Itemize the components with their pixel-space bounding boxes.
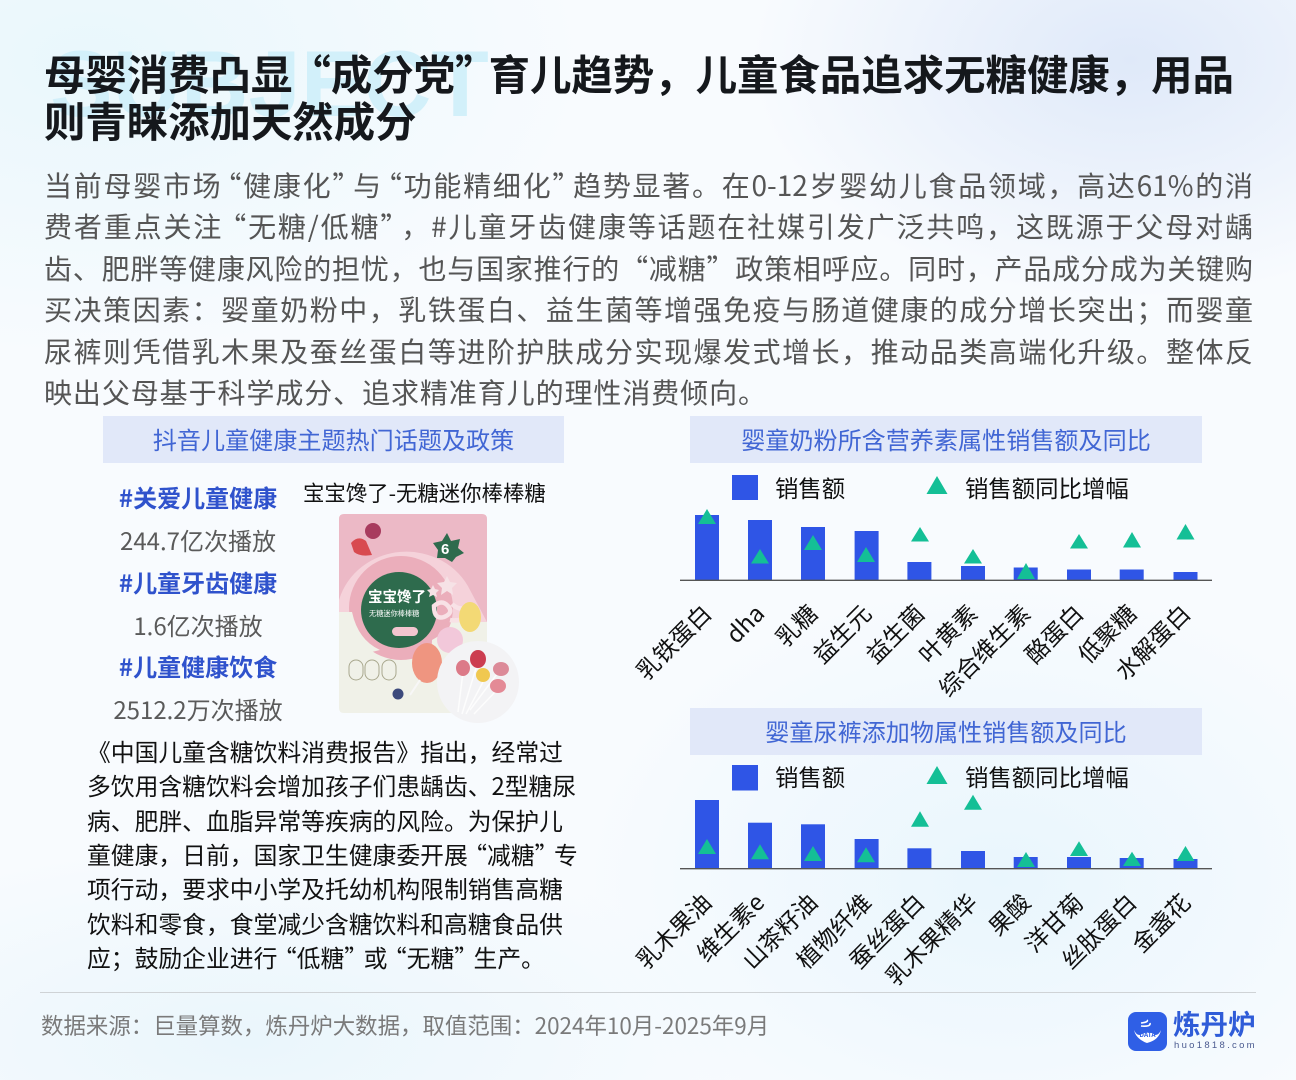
policy paragraph: 应；鼓励企业进行“低糖”或“无糖”生产。 [87,939,545,974]
intro text block: 齿、肥胖等健康风险的担忧，也与国家推行的“减糖”政策相呼应。同时，产品成分成为关键购 [44,248,1253,288]
axis labels: 蚕丝蛋白 [840,885,931,975]
plate of lollipops [437,641,519,723]
axis labels: 乳木果精华 [877,885,984,992]
policy paragraph: 多饮用含糖饮料会增加孩子们患龋齿、2型糖尿 [87,767,576,802]
axis labels: dha [717,596,771,650]
data source footer: 数据来源：巨量算数，炼丹炉大数据，取值范围：2024年10月-2025年9月 [41,1009,769,1041]
logo [1128,1002,1257,1051]
large candies [392,602,481,700]
topic list: #儿童牙齿健康 [119,564,277,599]
axis labels: 低聚糖 [1069,596,1143,670]
topic list: #关爱儿童健康 [119,479,277,514]
policy paragraph: 饮料和零食，食堂减少含糖饮料和高糖食品供 [87,904,563,940]
intro text block: 映出父母基于科学成分、追求精准育儿的理性消费倾向。 [44,372,766,412]
legend: 销售额 [775,759,845,793]
axis labels: 叶黄素 [910,596,984,670]
bars [695,515,1198,580]
heading: diaper additives chart: 婴童尿裤添加物属性销售额及同比 [765,713,1127,748]
stars and swirl [427,576,470,620]
legend: 销售额同比增幅 [965,470,1129,504]
age badge: 6 [441,541,449,558]
topic list: 1.6亿次播放 [133,607,263,642]
axis labels: 乳木果油 [627,885,718,975]
title: 母婴消费凸显“成分党”育儿趋势，儿童食品追求无糖健康，用品 [44,42,1234,102]
axis labels: 水解蛋白 [1106,596,1197,686]
policy paragraph [87,733,578,974]
axis labels: 金盏花 [1123,885,1197,959]
package text [368,586,426,636]
axis labels: 酪蛋白 [1016,596,1090,670]
intro text block: 当前母婴市场“健康化”与“功能精细化”趋势显著。在0-12岁婴幼儿食品领域，高达61%的消 [44,165,1253,205]
title [44,42,1234,149]
growth markers [698,795,1194,867]
topic list: 244.7亿次播放 [120,522,276,557]
axis [680,579,1212,581]
axis labels: 洋甘菊 [1016,885,1090,959]
brand url: huo1818.com [1174,1040,1257,1051]
policy paragraph: 《中国儿童含糖饮料消费报告》指出，经常过 [87,733,563,768]
axis labels: 植物纤维 [787,885,878,975]
heading: diaper additives chart [690,708,1202,755]
age badge [433,533,464,562]
topic list: 2512.2万次播放 [113,691,283,726]
title: 则青睐添加天然成分 [44,89,417,149]
axis labels: 丝肽蛋白 [1052,885,1143,975]
legend: 销售额同比增幅 [965,759,1129,793]
brand name: 炼丹炉 [1173,1002,1256,1042]
heading: douyin topics: 抖音儿童健康主题热门话题及政策 [153,421,514,456]
axis labels: 益生菌 [857,596,931,670]
topic list [113,479,283,726]
package text: 宝宝馋了 [368,586,426,607]
intro text block: 买决策因素：婴童奶粉中，乳铁蛋白、益生菌等增强免疫与肠道健康的成分增长突出；而婴童 [44,289,1253,329]
watermark: SUBJECT: SUBJECT [50,31,489,136]
axis labels: 乳铁蛋白 [627,596,718,686]
legend [732,759,1129,793]
ingredient badges [349,660,396,680]
intro text block: 尿裤则凭借乳木果及蚕丝蛋白等进阶护肤成分实现爆发式增长，推动品类高端化升级。整体反 [44,331,1253,371]
heading: formula nutrients chart: 婴童奶粉所含营养素属性销售额及同比 [741,421,1151,456]
cherry and strawberry [351,523,381,556]
icon: logo cauldron [1128,1012,1167,1051]
icon: logo cauldron: DATA [1139,1029,1156,1039]
heading: douyin topics [103,416,564,463]
topic list: #儿童健康饮食 [119,648,277,683]
axis labels: 维生素e [688,885,771,968]
legend: 销售额 [775,470,845,504]
legend [732,470,1129,504]
intro text block: 费者重点关注“无糖/低糖”，#儿童牙齿健康等话题在社媒引发广泛共鸣，这既源于父母对龋 [44,206,1253,246]
policy paragraph: 项行动，要求中小学及托幼机构限制销售高糖 [87,870,563,905]
product caption: 宝宝馋了-无糖迷你棒棒糖 [303,477,546,508]
axis labels: 益生元 [804,596,878,670]
policy paragraph: 童健康，日前，国家卫生健康委开展“减糖”专 [87,836,578,871]
growth markers [698,509,1194,579]
axis labels: 综合维生素 [930,596,1037,703]
bars [695,800,1198,868]
axis labels [627,885,1197,992]
product image: candy pouch [339,514,519,723]
axis [680,868,1212,870]
intro text block [44,165,1253,412]
axis labels [627,596,1197,703]
package text: 无糖迷你棒棒糖 [369,609,419,619]
axis labels: 乳糖 [767,596,824,653]
axis labels: 山茶籽油 [733,885,824,975]
axis labels: 果酸 [980,885,1037,942]
heading: formula nutrients chart [690,416,1202,463]
policy paragraph: 病、肥胖、血脂异常等疾病的风险。为保护儿 [87,802,563,837]
